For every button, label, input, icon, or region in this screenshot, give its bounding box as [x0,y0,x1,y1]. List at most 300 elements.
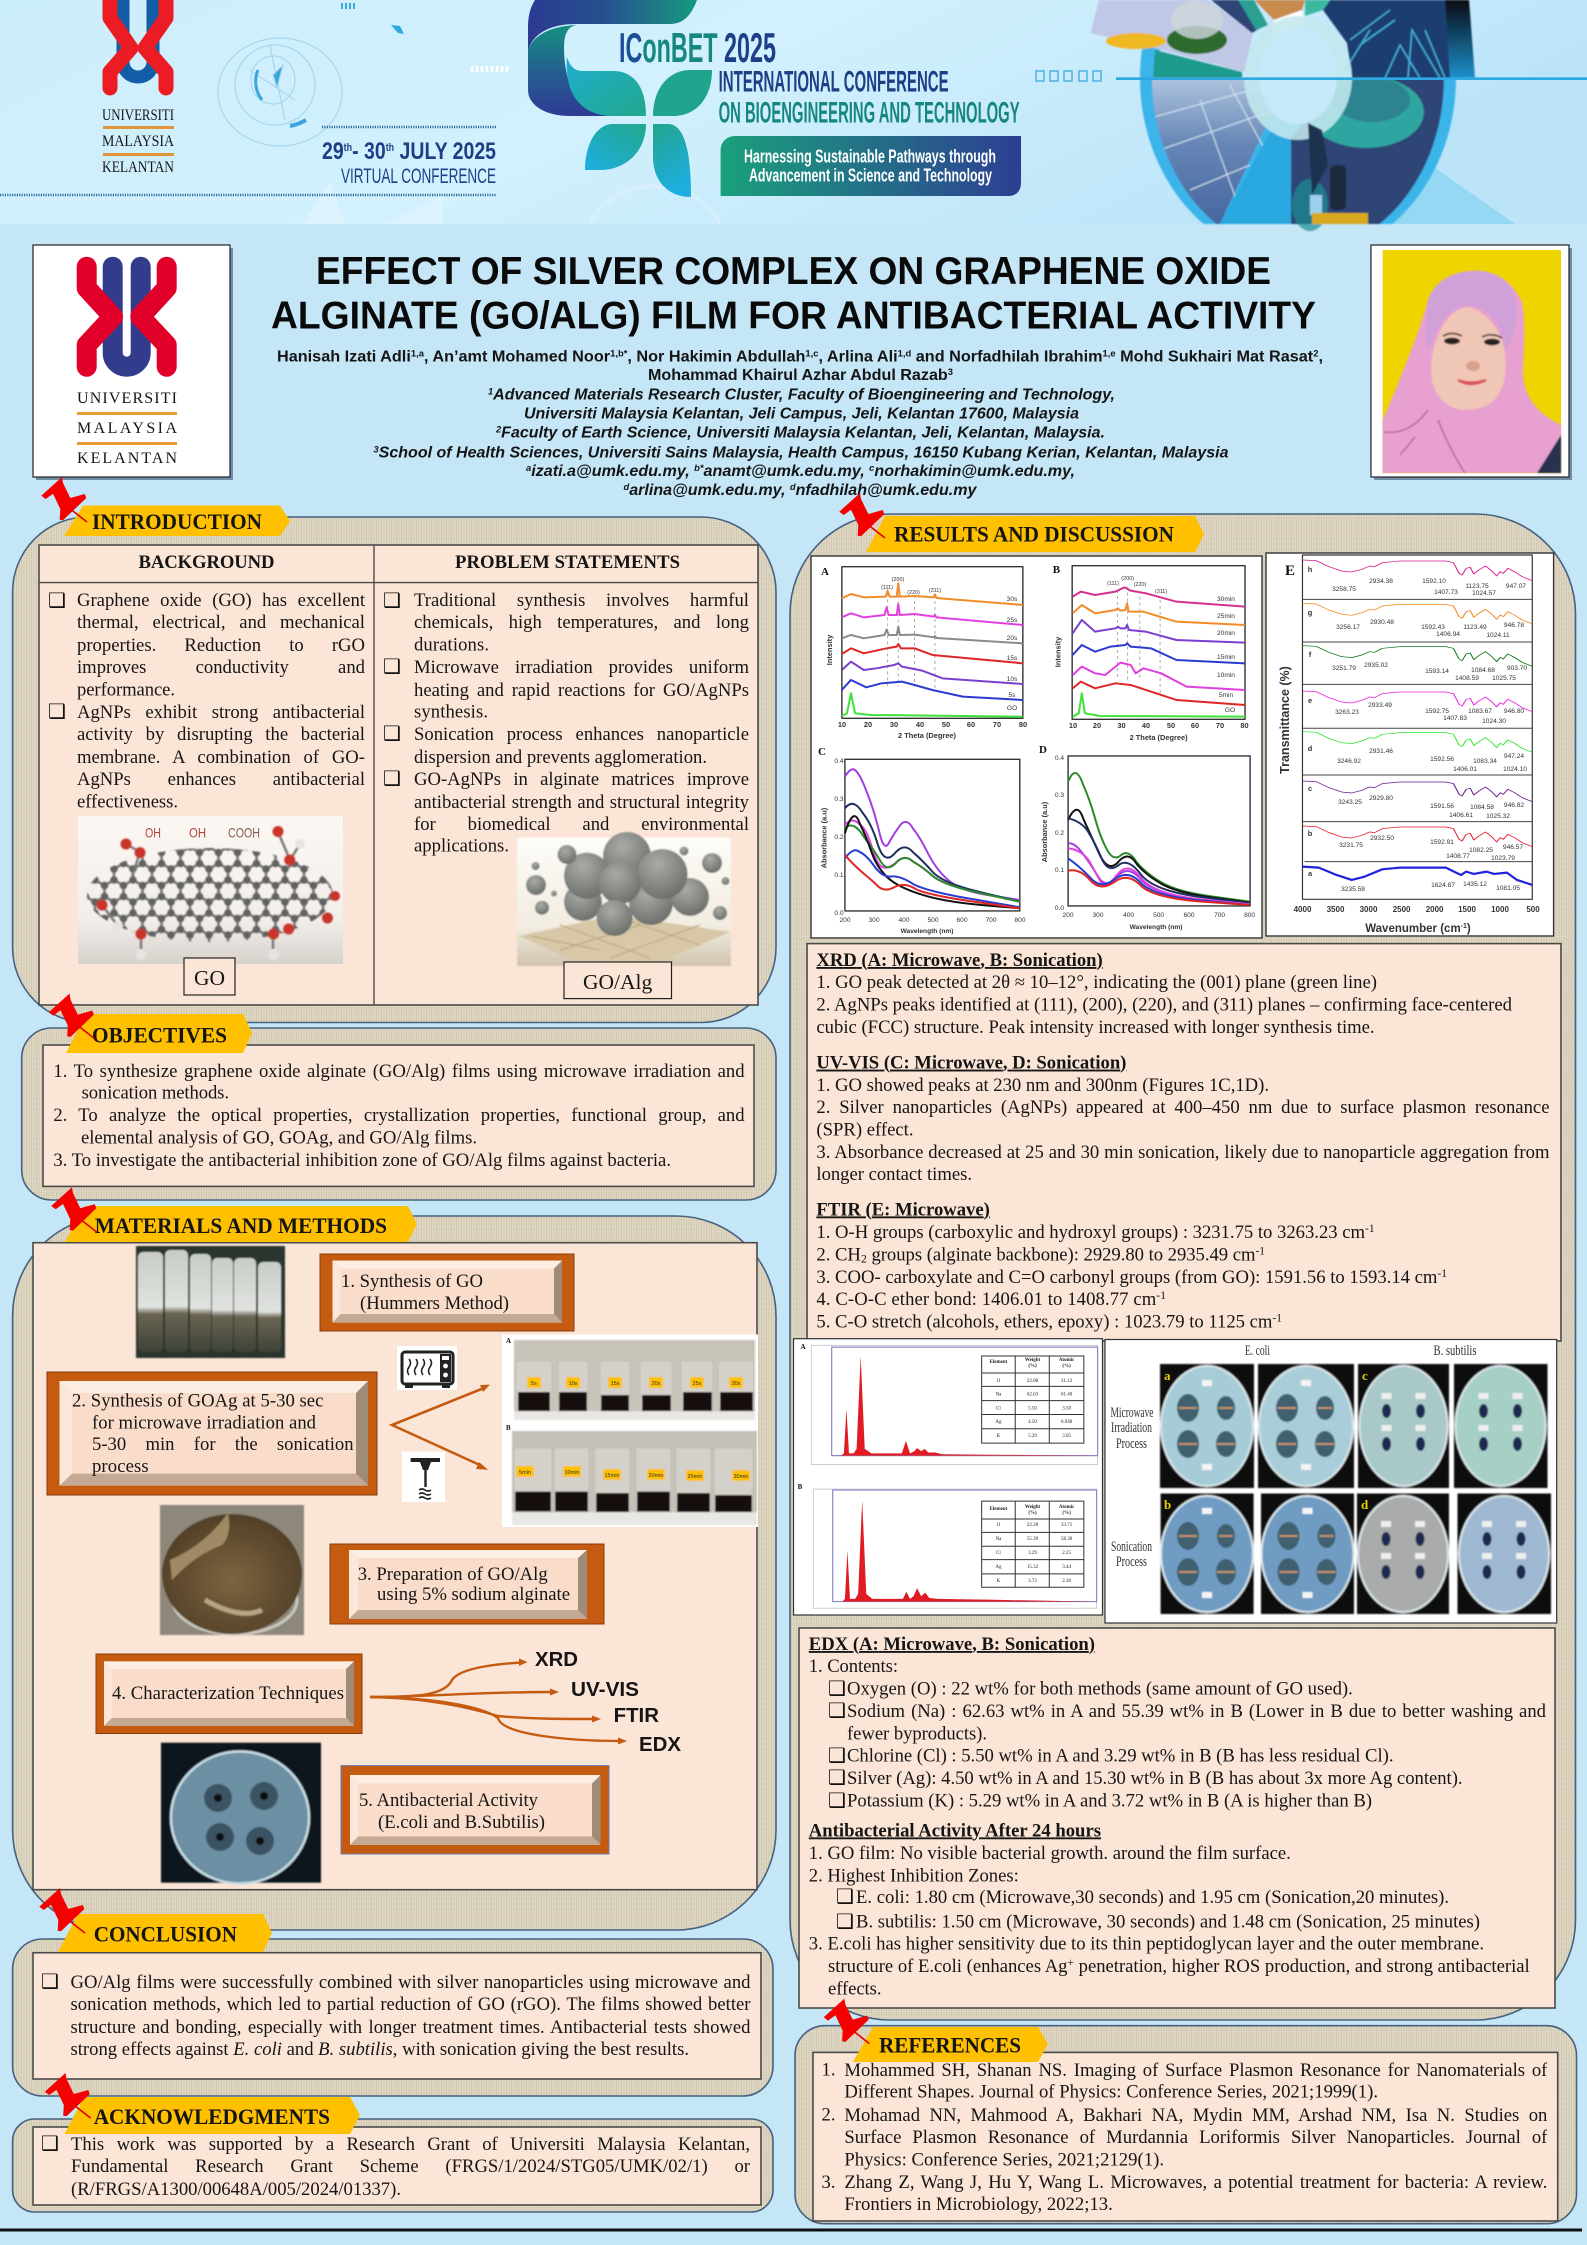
chart C: UV-VIS microwave: 700 [985,917,997,924]
text block: objectives list: 2. To analyze the optical properties, crystallization properties, functional group, and [53,1105,745,1126]
chart card E: FTIR: 946.80 [1504,708,1524,715]
arrows: characterization branches [370,1658,627,1744]
step 5: antibacterial activity: 5. Antibacterial Activity [359,1790,539,1811]
icon: UMK logo small: MALAYSIA [102,133,174,150]
chart card: EDX spectra: O [997,1379,1001,1384]
chart A: XRD microwave: 30 [890,720,898,729]
chart card: EDX spectra: Na [995,1392,1002,1398]
image card: antibacterial inhibition plates: d [1361,1497,1369,1512]
chart card E: FTIR: 1407.73 [1434,589,1458,596]
chart card: EDX spectra: Ag [995,1565,1002,1570]
EDX findings: 1. Contents: [809,1656,898,1677]
conference dates: - 30 [352,138,386,165]
text block: problem statement bullets: ❑ [383,654,401,678]
image: sample beakers: 30s [732,1381,741,1387]
chart card E: FTIR: 1592.75 [1425,708,1449,715]
chart card E: FTIR: 3500 [1327,905,1345,914]
antibacterial findings: penetration, higher ROS production, and strong antibacterial [1074,1956,1530,1977]
ribbon: results and discussion [866,516,1204,552]
chart card E: FTIR: 1408.77 [1446,853,1470,860]
EDX findings: Potassium (K) : 5.29 wt% in A and 3.72 wt% in B (A is higher than B) [847,1790,1372,1812]
icon: IConBET leaf mark [528,0,712,197]
authors and affiliations: Mohd Sukhairi Mat Rasat [1116,349,1313,366]
text block: problem statement bullets: chemicals, high temperatures, and long [414,612,749,633]
chart B: XRD sonication: Intensity [1054,636,1062,667]
image: graphene oxide molecule: OH [189,824,206,840]
text block: XRD, UV-VIS and FTIR findings [807,944,1561,1341]
image card: antibacterial inhibition plates: a [1164,1368,1171,1383]
text block: conclusion: GO/Alg films were successfully combined with silver nanoparticles using microwave and [70,1972,750,1993]
panel: introduction [13,477,776,1022]
panel: acknowledgments [13,2073,773,2212]
authors and affiliations: 3 [948,367,953,377]
UV-VIS findings: 2. Silver nanoparticles (AgNPs) appeared at 400–450 nm due to surface plasmon resonance [816,1097,1549,1118]
university name: MALAYSIA [77,420,177,437]
conference title text: IConBET 2025 [619,24,776,71]
icon: pin [39,1888,85,1933]
arrow: to microwave and sonication samples [392,1385,490,1470]
chart card E: FTIR: 1592.10 [1422,578,1446,585]
university logo card [33,245,233,480]
ribbon: acknowledgments: ACKNOWLEDGMENTS [94,2104,330,2129]
chart card E: FTIR: 946.57 [1503,844,1523,851]
text block: background bullets: improves conductivity and [77,657,365,678]
text block: acknowledgments: This work was supported by a Research Grant of Universiti Malaysia Kelantan, [71,2134,750,2155]
UV-VIS findings: (SPR) effect. [816,1120,914,1140]
text block: problem statement bullets: dispersion and prevents agglomeration. [414,747,707,768]
authors and affiliations: School of Health Sciences, Universiti Sains Malaysia, Health Campus, 16150 Kubang Kerian, Kelantan, Malaysia [379,444,1229,461]
chart D: UV-VIS sonication: Wavelength (nm) [1130,924,1182,931]
chart card E: FTIR: 2932.50 [1370,835,1394,842]
chart card E: FTIR: 2500 [1393,905,1411,914]
image card: antibacterial inhibition plates: Sonication [1111,1539,1152,1555]
image card: antibacterial inhibition plates: c [1362,1368,1368,1383]
label: GO [184,958,235,995]
icon: microwave [397,1346,457,1390]
text block: problem statement bullets: ❑ [383,766,401,790]
FTIR findings: -1 [1255,1246,1265,1258]
FTIR findings: -1 [1365,1223,1375,1235]
chart card: EDX spectra: Na [995,1537,1002,1542]
icon: UMK logo small [102,0,174,176]
UV-VIS findings: UV-VIS (C: Microwave, D: Sonication) [816,1053,1126,1074]
authors and affiliations: b* [694,463,704,473]
chart C: UV-VIS microwave: 0.3 [834,796,844,803]
chart card E: FTIR: 1500 [1458,905,1476,914]
chart card E: FTIR: 1084.68 [1471,667,1495,674]
image card: antibacterial inhibition plates: E. coli [1245,1343,1270,1359]
chart card E: FTIR: 4000 [1294,905,1312,914]
chart card: EDX spectra: 5.29 [1028,1434,1037,1439]
UV-VIS findings: 3. Absorbance decreased at 25 and 30 min sonication, likely due to nanoparticle aggregation from [816,1142,1549,1163]
chart card: EDX spectra: 0.940 [1061,1420,1073,1425]
chart D: UV-VIS sonication: 200 [1062,912,1074,919]
authors and affiliations: arlina@umk.edu.my, [629,482,790,499]
FTIR findings: 5. C-O stretch (alcohols, ethers, epoxy) : 1023.79 to 1125 cm [816,1312,1272,1332]
chart card: EDX spectra: Cl [996,1551,1001,1556]
text block: objectives list: elemental analysis of GO, GOAg, and GO/Alg films. [81,1128,477,1149]
image: graphene oxide molecule: COOH [228,824,260,840]
chart card: EDX spectra: B [798,1483,803,1491]
text block: conclusion: sonication methods, which led to partial reduction of GO (rGO). The films showed better [70,1994,750,2015]
chart A: XRD microwave: 10 [838,720,846,729]
chart card E: FTIR [1266,553,1554,936]
step 2: synthesis of GOAg: 5-30 min for the sonication [92,1434,354,1455]
chart card E: FTIR: 3235.58 [1341,886,1365,893]
author photo [1371,245,1572,480]
icon: UMK logo small: KELANTAN [102,159,174,176]
heading: background: BACKGROUND [138,552,274,573]
icon: pin [824,1999,869,2044]
chart card E: FTIR: 1083.67 [1468,708,1492,715]
chart A: XRD microwave: 20 [864,720,872,729]
chart card E: FTIR: 1023.79 [1491,855,1515,862]
chart D: UV-VIS sonication: D [1039,744,1047,756]
panel: results and discussion [790,493,1576,2020]
chart C: UV-VIS microwave: 500 [927,917,939,924]
chart C: UV-VIS microwave: Wavelength (nm) [901,928,953,935]
chart B: XRD sonication: (111) [1107,581,1119,587]
chart card: EDX spectra: 22.28 [1027,1523,1039,1528]
label: UV-VIS: UV-VIS [571,1678,639,1701]
chart card E: FTIR: ) [1467,923,1471,935]
text block: references list: 1. [822,2060,836,2081]
chart card E: FTIR: 946.82 [1504,802,1524,809]
FTIR findings: -1 [1156,1290,1166,1302]
step 4: characterization techniques [96,1654,362,1734]
chart C: UV-VIS microwave: 300 [868,917,880,924]
text block: references list: Physics: Conference Series, 2021;2129(1). [844,2150,1164,2171]
EDX findings: Oxygen (O) : 22 wt% for both methods (same amount of GO used). [847,1678,1353,1700]
text block: problem statement bullets: Sonication process enhances nanoparticle [414,724,749,745]
chart D: UV-VIS sonication: Absorbance (a.u) [1040,801,1049,862]
text block: background bullets: AgNPs exhibit strong antibacterial [77,702,365,723]
image: sample beakers: 5s [531,1381,537,1387]
chart card E: FTIR: 2000 [1426,905,1444,914]
authors and affiliations: 1,b* [610,349,628,359]
text block: acknowledgments [41,2131,750,2200]
chart card: XRD and UV-VIS [811,556,1262,938]
EDX findings: ❑ [828,1676,846,1700]
text block: background bullets: AgNPs enhances antibacterial [77,769,365,790]
conference theme button: Harnessing Sustainable Pathways through [744,147,996,167]
chart card: EDX spectra: Weight [1025,1505,1040,1510]
step 2: synthesis of GOAg: process [92,1456,149,1477]
chart B: XRD sonication: 40 [1142,721,1150,730]
chart card E: FTIR: 2934.38 [1369,578,1393,585]
XRD findings: 1. GO peak detected at 2θ ≈ 10–12°, indicating the (001) plane (green line) [816,972,1377,993]
chart card E: FTIR: c [1308,784,1312,793]
chart D: UV-VIS sonication: 0.2 [1055,830,1064,837]
chart card: EDX spectra: (%) [1028,1364,1037,1369]
step 3: preparation of GO/Alg [330,1544,604,1624]
image card: antibacterial inhibition plates [1105,1340,1557,1623]
step 5: antibacterial activity [341,1766,609,1854]
chart A: XRD microwave: 15s [1007,655,1018,662]
antibacterial findings: + [1067,1957,1074,1969]
label: FTIR: FTIR [614,1704,659,1727]
conference theme button: Advancement in Science and Technology [749,166,992,186]
chart B: XRD sonication: 20 [1093,721,1101,730]
text block: objectives list [53,1058,745,1171]
text block: background bullets [48,587,365,813]
chart A: XRD microwave: 60 [967,720,975,729]
authors and affiliations: a [526,463,531,473]
step 1: synthesis of GO: 1. Synthesis of GO [341,1271,483,1292]
chart B: XRD sonication: 60 [1191,721,1199,730]
text block: problem statement bullets: heating and rapid reactions for GO/AgNPs [414,680,749,701]
title: EFFECT OF SILVER COMPLEX ON GRAPHENE OXIDE [316,250,1271,293]
text block: objectives list: sonication methods. [82,1083,229,1104]
FTIR findings: -1 [1272,1312,1282,1324]
chart B: XRD sonication: 10min [1217,672,1235,679]
FTIR findings: 3. COO- carboxylate and C=O carbonyl groups (from GO): 1591.56 to 1593.14 cm [816,1267,1437,1288]
chart A: XRD microwave: (220) [907,590,920,596]
icon: faint circuit wheel decoration [218,3,507,146]
chart B: XRD sonication: 80 [1240,721,1249,730]
chart A: XRD microwave: 40 [916,720,924,729]
EDX findings: Silver (Ag): 4.50 wt% in A and 15.30 wt% in B (B has about 3x more Ag content). [847,1768,1463,1789]
chart card E: FTIR: 3251.79 [1332,665,1356,672]
step 5: antibacterial activity: (E.coli and B.Subtilis) [378,1812,545,1833]
ribbon: introduction: INTRODUCTION [92,509,262,534]
chart card E: FTIR: 1024.10 [1503,766,1527,773]
EDX findings: ❑ [828,1765,846,1789]
label: GO/Alg [564,962,672,999]
panel: materials and methods [13,1187,776,1930]
chart A: XRD microwave: (311) [929,588,941,594]
conference dates: th [386,142,394,154]
label: GO: GO [194,966,225,990]
chart card: EDX spectra: 3.50 [1062,1406,1071,1411]
chart card E: FTIR: 1592.56 [1430,756,1454,763]
chart card: EDX spectra: 3.05 [1062,1434,1071,1439]
image: sample beakers: 25min [688,1474,702,1480]
chart card E: FTIR: h [1308,565,1313,574]
chart card E: FTIR: 2931.46 [1369,748,1393,755]
chart card E: FTIR: 947.24 [1504,753,1524,760]
chart card E: FTIR: E [1285,563,1295,579]
conference header banner [0,0,1587,232]
chart card E: FTIR: 3263.23 [1335,709,1359,716]
FTIR findings: FTIR (E: Microwave) [816,1199,990,1220]
chart card E: FTIR: 1024.11 [1486,632,1510,639]
panel: objectives [22,994,776,1200]
chart B: XRD sonication: 5min [1219,692,1233,699]
chart card: EDX spectra: 4.50 [1028,1420,1037,1425]
image: sample beakers [502,1334,758,1527]
chart card: EDX spectra: Element [990,1360,1008,1365]
text block: background bullets: effectiveness. [77,792,178,813]
chart card: EDX spectra: 3.29 [1028,1551,1037,1556]
university name [77,390,177,467]
antibacterial findings: effects. [828,1979,882,2000]
authors and affiliations: and Norfadhilah Ibrahim [911,349,1103,366]
image card: antibacterial inhibition plates: Process [1116,1554,1147,1570]
chart C: UV-VIS microwave [818,746,1026,935]
text block: background bullets: Graphene oxide (GO) has excellent [77,590,365,611]
chart C: UV-VIS microwave: 0.0 [834,910,844,917]
chart D: UV-VIS sonication: 700 [1214,912,1225,919]
ribbon: results and discussion: RESULTS AND DISCUSSION [894,522,1174,547]
chart card E: FTIR: 3258.75 [1332,586,1356,593]
chart D: UV-VIS sonication: 300 [1092,912,1104,919]
chart card E: FTIR: 1406.01 [1453,766,1477,773]
chart B: XRD sonication: (220) [1134,582,1146,588]
text block: problem statement bullets: for biomedical and environmental [414,814,749,835]
chart D: UV-VIS sonication: 0.1 [1055,867,1064,874]
EDX findings: ❑ [828,1743,846,1767]
XRD findings [816,950,1513,1038]
chart B: XRD sonication: 2 Theta (Degree) [1130,733,1188,742]
text block: problem statement bullets: durations. [414,635,489,656]
image: sample beakers: A [506,1337,511,1345]
step 1: synthesis of GO [320,1254,574,1331]
chart card E: FTIR: 500 [1526,905,1540,914]
chart card E: FTIR: 1408.59 [1455,675,1479,682]
authors and affiliations: izati.a@umk.edu.my, [531,463,694,480]
image: GO vials [136,1246,285,1358]
icon: UMK logo small: UNIVERSITI [102,107,174,124]
text block: objectives list: 1. To synthesize graphene oxide alginate (GO/Alg) films using microwave irradiation and [53,1061,745,1082]
chart card: EDX spectra: K [997,1579,1001,1584]
icon: UMK emblem [87,267,167,367]
image: GO/Alg film [160,1505,304,1635]
chart card E: FTIR: 1592.43 [1421,624,1445,631]
chart B: XRD sonication: 20min [1217,630,1235,637]
image: sample beakers: 10min [565,1470,579,1476]
authors and affiliations: , [1318,349,1323,366]
text block: problem statement bullets: Traditional synthesis involves harmful [414,590,749,611]
chart card E: FTIR: 3000 [1360,905,1378,914]
chart A: XRD microwave: 80 [1019,720,1027,729]
chart D: UV-VIS sonication: 0.4 [1055,755,1064,762]
antibacterial findings: ❑ [836,1909,854,1933]
image card: antibacterial inhibition plates: Irradiation [1111,1420,1152,1436]
authors and affiliations: c [869,463,874,473]
antibacterial findings: 2. Highest Inhibition Zones: [809,1866,1019,1886]
chart card E: FTIR: 1025.32 [1486,813,1510,820]
text block: problem statement bullets: ❑ [383,721,401,745]
chart card: EDX spectra: Weight [1025,1358,1040,1363]
chart card: EDX spectra [794,1339,1102,1615]
label: XRD: XRD [535,1648,578,1671]
step 2: synthesis of GOAg: 2. Synthesis of GOAg at 5-30 sec [72,1391,323,1412]
image: sample beakers: B [506,1424,511,1432]
image card: antibacterial inhibition plates: Microwave [1110,1405,1154,1421]
chart card E: FTIR: 2935.02 [1364,662,1388,669]
FTIR findings: -1 [1437,1268,1447,1280]
ribbon: objectives [66,1014,252,1053]
conference theme button [721,136,1021,196]
icon: pin [41,477,87,522]
chart A: XRD microwave: 30s [1007,596,1018,603]
label: EDX: EDX [639,1733,681,1756]
image card: antibacterial inhibition plates: B. subtilis [1434,1343,1477,1359]
text block: background bullets: ❑ [48,699,66,723]
EDX findings [809,1634,1546,1812]
authors and affiliations: Faculty of Earth Science, Universiti Malaysia Kelantan, Jeli, Kelantan, Malaysia. [501,424,1105,441]
image: graphene oxide molecule [78,816,343,964]
chart card E: FTIR: 1624.87 [1431,882,1455,889]
text block: references list: 2. [822,2105,836,2126]
chart card: EDX spectra: 15.32 [1027,1565,1039,1570]
icon: science lens collage [1090,0,1476,232]
authors and affiliations: 1,e [1103,349,1116,359]
ribbon: conclusion: CONCLUSION [94,1922,237,1947]
chart B: XRD sonication [1053,564,1249,742]
image card: antibacterial inhibition plates: b [1164,1497,1171,1512]
chart card: EDX spectra: 2.30 [1062,1579,1071,1584]
antibacterial findings: 3. E.coli has higher sensitivity due to its thin peptidoglycan layer and the outer membrane. [809,1934,1484,1955]
ribbon: references [853,2027,1048,2062]
chart card E: FTIR: 3231.75 [1339,842,1363,849]
authors and affiliations: 2 [495,424,501,434]
chart A: XRD microwave: GO [1007,705,1017,712]
chart card E: FTIR: 1083.34 [1473,758,1497,765]
chart card E: FTIR: 1081.05 [1496,885,1520,892]
text block: background bullets: performance. [77,680,175,701]
antibacterial findings: B. subtilis: 1.50 cm (Microwave, 30 seconds) and 1.48 cm (Sonication, 25 minutes) [856,1912,1480,1933]
conference dates: 29 [322,138,349,165]
chart B: XRD sonication: GO [1225,707,1235,714]
text block: conclusion [41,1969,750,2060]
chart card: EDX spectra: (%) [1062,1511,1071,1516]
antibacterial findings: E. coli: 1.80 cm (Microwave,30 seconds) and 1.95 cm (Sonication,20 minutes). [856,1887,1449,1908]
chart card E: FTIR: 2929.80 [1369,795,1393,802]
image: sample beakers: 20min [649,1473,663,1479]
authors and affiliations: d [790,482,796,492]
text block: background bullets: activity by disrupting the bacterial [77,724,365,745]
text block: problem statement bullets [383,587,749,857]
chart card: EDX spectra: Ag [995,1420,1002,1425]
image: GO/Alg nanoparticles on sheet [517,832,731,966]
EDX findings: ❑ [828,1698,846,1722]
image: sample beakers: 15min [605,1473,619,1479]
chart card E: FTIR: Transmittance (%) [1278,666,1292,774]
panel: conclusion [13,1888,773,2096]
conference title text: INTERNATIONAL CONFERENCE [719,66,949,99]
text block: acknowledgments: Fundamental Research Grant Scheme (FRGS/1/2024/STG05/UMK/02/1) or [71,2156,750,2177]
image: sample beakers: 25s [693,1381,702,1387]
step 2: synthesis of GOAg [47,1372,377,1495]
authors and affiliations: anamt@umk.edu.my, [704,463,869,480]
text block: EDX and antibacterial findings [799,1628,1555,2008]
text block: acknowledgments: (R/FRGS/A1300/00648A/005/2024/01337). [71,2179,401,2200]
chart card E: FTIR: g [1308,608,1313,617]
image: antibacterial petri dish [161,1743,321,1884]
chart B: XRD sonication: 25min [1217,613,1235,620]
text block: conclusion: strong effects against E. coli and B. subtilis, with sonication giving the best results. [70,2039,689,2060]
chart card: EDX spectra: 55.39 [1027,1537,1039,1542]
icon: pin [49,994,94,1039]
authors and affiliations: , Nor Hakimin Abdullah [627,349,805,366]
text block: background bullets: ❑ [48,588,66,612]
ribbon: objectives: OBJECTIVES [92,1023,227,1048]
ribbon: references: REFERENCES [879,2032,1021,2057]
authors and affiliations: Universiti Malaysia Kelantan, Jeli Campus, Jeli, Kelantan 17600, Malaysia [524,405,1079,422]
chart C: UV-VIS microwave: 200 [839,917,851,924]
university name: UNIVERSITI [77,390,177,407]
chart card E: FTIR: 1592.91 [1430,839,1454,846]
text block: references list: Zhang Z, Wang J, Hu Y, Wang L. Microwaves, a potential treatment for bacteria: A review. [844,2172,1547,2193]
text block: references list: Mohamad NN, Mahmood A, Bakhari NA, Mydin MM, Arshad NM, Isa N. Studies on [844,2105,1547,2126]
UV-VIS findings: longer contact times. [816,1164,972,1185]
text block: problem statement bullets: Microwave irradiation provides uniform [414,657,749,678]
chart card E: FTIR: 1084.58 [1470,804,1494,811]
chart card E: FTIR: 1123.49 [1463,624,1487,631]
panel: references [795,1999,1576,2224]
